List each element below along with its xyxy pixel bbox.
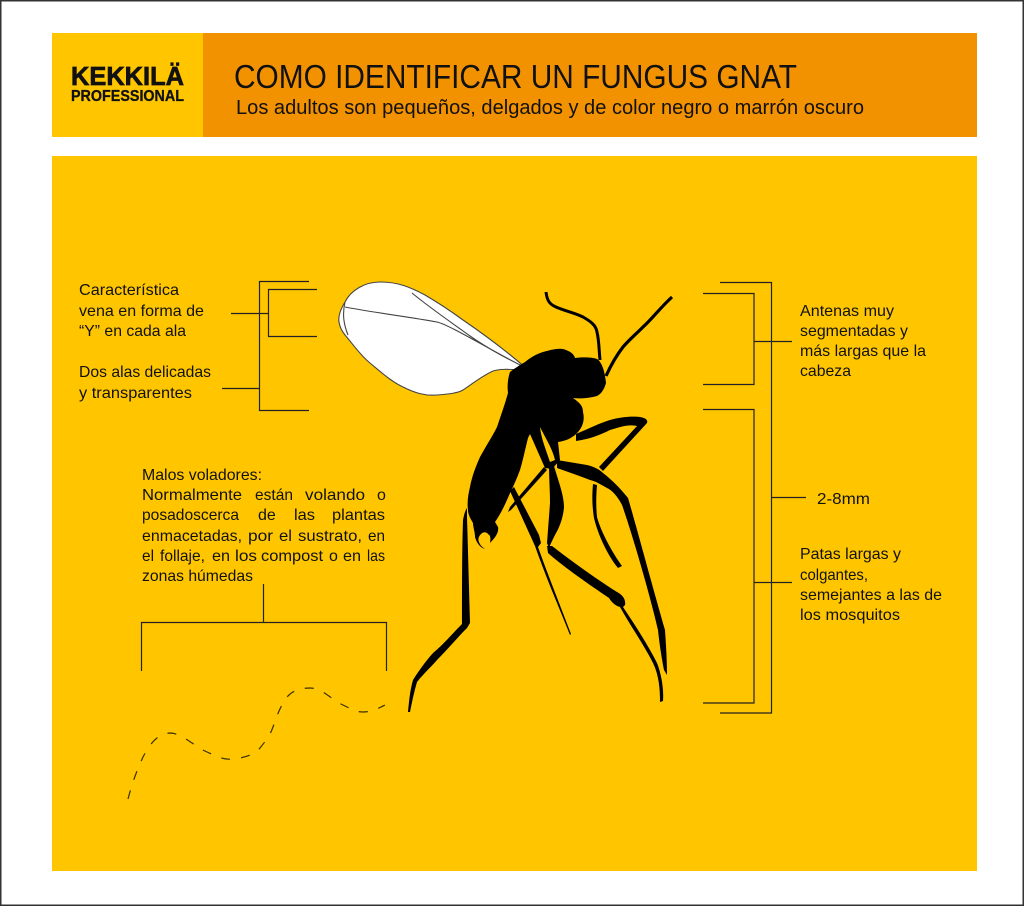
label: poor fliers xyxy=(142,467,386,585)
label: poor fliers: follaje, xyxy=(160,548,205,565)
hind tibia and tarsus xyxy=(547,546,663,702)
title: COMO IDENTIFICAR UN FUNGUS GNAT xyxy=(234,58,797,95)
label: poor fliers: el xyxy=(279,528,292,545)
label: antennae: Antenas muy xyxy=(800,303,894,320)
label: two wings xyxy=(79,364,211,402)
bracket: legs xyxy=(703,410,792,703)
main yellow panel xyxy=(52,156,977,871)
label: poor fliers: están xyxy=(255,487,293,504)
label: poor fliers: por xyxy=(248,528,274,545)
label: poor fliers: Malos voladores: xyxy=(142,467,262,484)
right middle leg xyxy=(557,460,667,675)
label: poor fliers: sustrato, xyxy=(298,528,362,545)
insect: fungus gnat xyxy=(339,282,672,712)
label: poor fliers: las xyxy=(294,507,315,524)
label: Y-shaped vein: “Y” en cada ala xyxy=(79,323,186,340)
label: poor fliers: el xyxy=(142,548,154,565)
header band xyxy=(52,33,977,137)
label: size: 2-8mm xyxy=(817,491,870,508)
label: poor fliers: o xyxy=(377,487,386,504)
bracket: antennae xyxy=(703,294,792,384)
hind femur xyxy=(547,466,564,548)
label: two wings: Dos alas delicadas xyxy=(79,364,211,381)
label: antennae: más largas que la xyxy=(800,343,926,360)
thin crossing tarsus xyxy=(508,467,547,512)
bracket: right side total size xyxy=(720,282,806,713)
bracket: flight xyxy=(142,584,386,671)
label: legs: colgantes, xyxy=(800,567,868,584)
label: poor fliers: zonas húmedas xyxy=(142,568,253,585)
label: poor fliers: las xyxy=(367,548,385,565)
yellow sliver between thorax and leg xyxy=(540,427,555,462)
label: poor fliers: Normalmente xyxy=(142,487,242,504)
label: legs: semejantes a las de xyxy=(800,587,942,604)
label: poor fliers: en xyxy=(368,528,385,545)
label: poor fliers: en xyxy=(212,548,230,565)
right middle leg branch xyxy=(592,484,622,568)
label: legs: Patas largas y xyxy=(800,546,901,563)
logo: Kekkilä Professional: KEKKILÄ xyxy=(71,61,184,91)
label: poor fliers: compost xyxy=(261,548,324,565)
label: antennae: segmentadas y xyxy=(800,323,908,340)
logo: Kekkilä Professional: PROFESSIONAL xyxy=(71,88,184,105)
foreleg xyxy=(576,417,647,471)
label: poor fliers: plantas xyxy=(332,507,385,524)
bracket: wing annotations xyxy=(222,282,317,410)
logo: Kekkilä Professional xyxy=(71,61,184,105)
label: antennae: cabeza xyxy=(800,363,851,380)
middle leg thin xyxy=(510,487,571,635)
label: poor fliers: o xyxy=(329,548,338,565)
label: legs xyxy=(800,546,942,624)
body: thorax, head, abdomen xyxy=(468,349,606,549)
flight path dashed curve xyxy=(128,688,385,799)
label: Y-shaped vein xyxy=(79,282,204,340)
label: poor fliers: los xyxy=(235,548,257,565)
label: antennae xyxy=(800,303,926,380)
label: poor fliers: enmacetadas, xyxy=(142,528,242,545)
label: Y-shaped vein: vena en forma de xyxy=(79,303,204,320)
label: poor fliers: volando xyxy=(305,487,365,504)
label: poor fliers: posadoscerca xyxy=(142,507,239,524)
wing xyxy=(339,282,526,395)
label: legs: los mosquitos xyxy=(800,607,900,624)
label: poor fliers: de xyxy=(258,507,276,524)
label: poor fliers: en xyxy=(343,548,361,565)
rear leg left xyxy=(408,508,470,712)
subtitle: Los adultos son pequeños, delgados y de color negro o marrón oscuro xyxy=(236,97,864,119)
label: two wings: y transparentes xyxy=(79,385,192,402)
label: Y-shaped vein: Característica xyxy=(79,282,179,299)
antennae xyxy=(546,292,600,360)
